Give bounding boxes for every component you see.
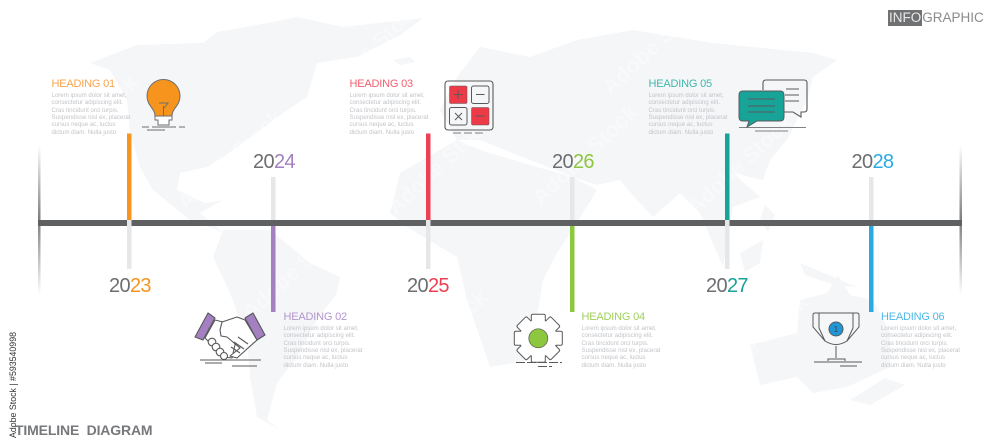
text block: heading 06: cursus neque ac, luctus	[881, 354, 945, 361]
trophy number: 1	[834, 325, 839, 334]
text block: heading 01: Lorem ipsum dolor sit amet,	[52, 92, 127, 99]
stock id: Adobe Stock | #593540998	[8, 332, 18, 438]
text block: heading 04: Lorem ipsum dolor sit amet,	[582, 325, 657, 332]
text block: heading 05: Lorem ipsum dolor sit amet,	[648, 92, 724, 99]
text block: heading 05: dictum diam. Nulla justo	[648, 129, 713, 136]
watermarks: Adobe Stock	[237, 214, 353, 325]
text block: heading 06: Cras tincidunt orci turpis.	[881, 340, 948, 347]
text block: heading 06: Suspendisse nisl ex, placerat	[881, 347, 960, 354]
text block: heading 05	[648, 78, 728, 136]
text block: heading 03: cursus neque ac, luctus	[350, 121, 414, 128]
text block: heading 04: dictum diam. Nulla justo	[582, 362, 646, 369]
text block: heading 01: Suspendisse nisl ex, placerat	[52, 114, 130, 121]
title: timeline diagram: TIMELINE DIAGRAM	[15, 422, 152, 438]
text block: heading 02	[284, 311, 362, 369]
text block: heading 02: HEADING 02	[284, 311, 347, 323]
year 2024: 2024	[253, 151, 295, 173]
watermarks: Adobe Stock	[527, 99, 643, 210]
watermarks: Adobe Stock	[697, 289, 813, 400]
year 2027: 2027	[706, 275, 748, 297]
text block: heading 02: Suspendisse nisl ex, placerat	[284, 347, 362, 354]
text block: heading 06: HEADING 06	[881, 311, 944, 323]
watermarks: Adobe Stock	[377, 284, 493, 395]
watermarks: Adobe Stock	[547, 239, 663, 350]
icon: gear	[514, 314, 563, 367]
text block: heading 04: consectetur adipiscing elit.	[582, 332, 653, 339]
icon: chat bubbles	[738, 80, 808, 132]
year 2026: 2026	[552, 151, 594, 173]
text block: heading 03: dictum diam. Nulla justo	[350, 129, 414, 136]
text block: heading 02: cursus neque ac, luctus	[284, 354, 348, 361]
year 2028: 2028	[852, 151, 893, 173]
brand: infographic	[888, 10, 984, 26]
watermarks: Adobe Stock	[27, 69, 143, 180]
watermarks: Adobe Stock	[0, 279, 113, 390]
text block: heading 01: consectetur adipiscing elit.	[52, 99, 123, 106]
text block: heading 05: Cras tincidunt orci turpis.	[648, 107, 716, 114]
watermarks: Adobe Stock	[682, 109, 798, 220]
text block: heading 06: Lorem ipsum dolor sit amet,	[881, 325, 956, 332]
text block: heading 01: dictum diam. Nulla justo	[52, 129, 116, 136]
text block: heading 05: consectetur adipiscing elit.	[648, 99, 720, 106]
text block: heading 04: Suspendisse nisl ex, placerat	[582, 347, 660, 354]
icon: calculator	[444, 80, 494, 134]
text block: heading 06: dictum diam. Nulla justo	[881, 362, 946, 369]
icon: trophy	[812, 312, 862, 366]
text block: heading 04: cursus neque ac, luctus	[582, 354, 646, 361]
watermarks: Adobe Stock	[382, 109, 498, 220]
text block: heading 03: consectetur adipiscing elit.	[350, 99, 421, 106]
text block: heading 05: cursus neque ac, luctus	[648, 121, 713, 128]
text block: heading 02: Cras tincidunt orci turpis.	[284, 340, 351, 347]
text block: heading 03	[350, 78, 428, 136]
text block: heading 05: Suspendisse nisl ex, placerat	[648, 114, 727, 121]
text block: heading 06	[881, 311, 960, 369]
text block: heading 01: Cras tincidunt orci turpis.	[52, 107, 119, 114]
year 2023: 2023	[109, 275, 151, 297]
text block: heading 03: Lorem ipsum dolor sit amet,	[350, 92, 425, 99]
text block: heading 03: HEADING 03	[350, 78, 413, 90]
text block: heading 04	[582, 311, 660, 369]
text block: heading 06: consectetur adipiscing elit.	[881, 332, 952, 339]
text block: heading 04: HEADING 04	[582, 311, 645, 323]
text block: heading 02: consectetur adipiscing elit.	[284, 332, 355, 339]
text block: heading 01: HEADING 01	[52, 78, 115, 90]
icon: handshake	[194, 312, 266, 366]
text block: heading 01: cursus neque ac, luctus	[52, 121, 116, 128]
text block: heading 02: dictum diam. Nulla justo	[284, 362, 348, 369]
watermarks: Adobe Stock	[172, 104, 288, 215]
watermarks: Adobe Stock	[842, 124, 958, 235]
brand: infographic: INFO	[889, 10, 921, 25]
icon: light bulb	[142, 79, 185, 130]
text block: heading 01	[52, 78, 130, 136]
year 2025: 2025	[407, 275, 449, 297]
text block: heading 05: HEADING 05	[648, 78, 712, 90]
text block: heading 04: Cras tincidunt orci turpis.	[582, 340, 649, 347]
text block: heading 03: Suspendisse nisl ex, placerat	[350, 114, 428, 121]
text block: heading 02: Lorem ipsum dolor sit amet,	[284, 325, 359, 332]
text block: heading 03: Cras tincidunt orci turpis.	[350, 107, 417, 114]
brand: infographic: GRAPHIC	[922, 10, 984, 25]
